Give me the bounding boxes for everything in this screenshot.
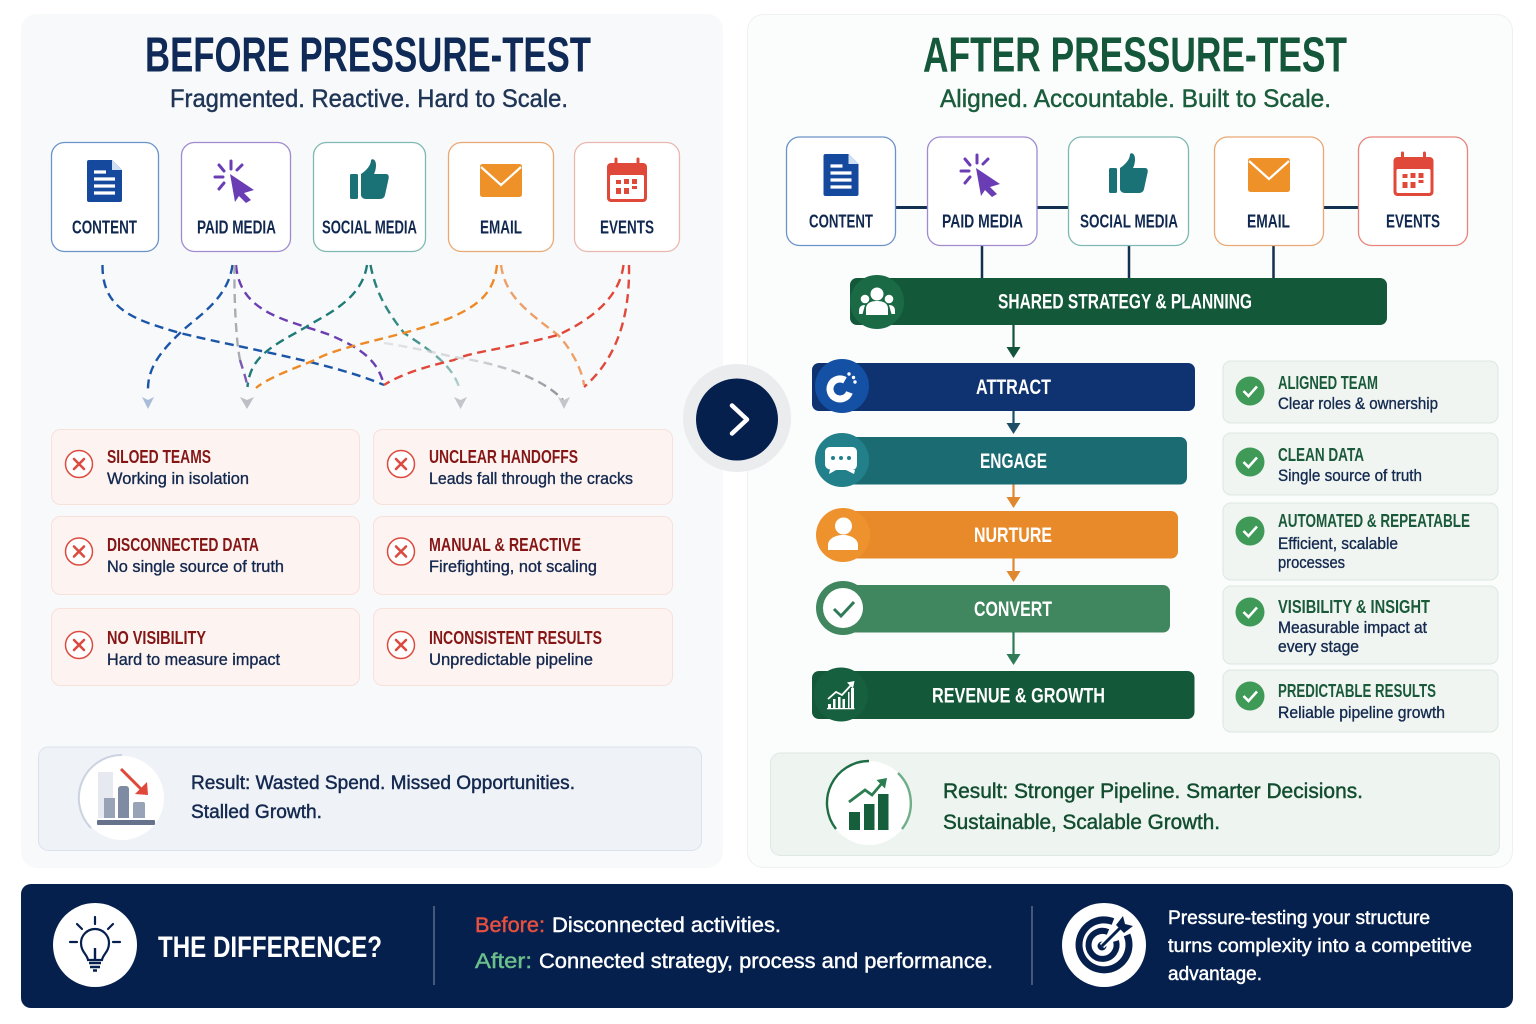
problem: unclear handoffs: Leads fall through the cracks	[429, 470, 633, 488]
arrow: engage to nurture	[1006, 484, 1020, 508]
banner: the difference	[21, 884, 1513, 1008]
channel card: content: CONTENT	[809, 212, 873, 232]
channel card: email	[448, 142, 554, 252]
before result callout: Result: Wasted Spend. Missed Opportunities.	[191, 772, 575, 794]
arrow: attract to engage	[1006, 411, 1020, 434]
channel card: email	[1214, 137, 1324, 246]
benefit: automated and repeatable	[1223, 503, 1498, 580]
benefit: aligned team: ALIGNED TEAM	[1278, 373, 1378, 393]
after statement: Connected strategy, process and performance.	[539, 949, 993, 973]
channel card: paid media	[182, 142, 290, 252]
stage: attract	[812, 359, 1195, 413]
bar: shared strategy and planning: SHARED STRATEGY & PLANNING	[998, 290, 1252, 314]
benefit: clean data: CLEAN DATA	[1278, 445, 1364, 465]
benefit: predictable results	[1223, 670, 1498, 732]
channel card: social media	[1068, 137, 1188, 246]
problem: inconsistent results	[374, 608, 672, 686]
problem: siloed teams: SILOED TEAMS	[107, 447, 211, 467]
channel card: social media	[314, 142, 426, 252]
closing statement	[1168, 908, 1472, 985]
after result callout	[770, 753, 1500, 856]
closing statement: advantage.	[1168, 964, 1262, 985]
stage: engage: ENGAGE	[980, 450, 1047, 473]
icon: rising bar chart	[827, 761, 911, 845]
problem: disconnected data	[52, 516, 360, 594]
problem: unclear handoffs: UNCLEAR HANDOFFS	[429, 447, 578, 467]
after title: AFTER PRESSURE-TEST	[923, 28, 1347, 82]
benefit: predictable results: Reliable pipeline growth	[1278, 704, 1445, 722]
before statement: Before:	[475, 913, 545, 937]
icon: declining bar chart	[79, 755, 164, 840]
closing statement: turns complexity into a competitive	[1168, 936, 1472, 957]
arrowheads	[142, 397, 570, 409]
problem: no visibility	[52, 608, 360, 686]
problem: inconsistent results: Unpredictable pipeline	[429, 651, 593, 669]
stage: attract: ATTRACT	[976, 376, 1051, 399]
arrow: strategy to attract	[1006, 325, 1020, 358]
channel card: events	[574, 142, 680, 252]
channel card: paid media: PAID MEDIA	[942, 212, 1023, 232]
channel card: social media: SOCIAL MEDIA	[1080, 212, 1178, 232]
stage: engage	[815, 433, 1187, 487]
benefit: automated and repeatable: AUTOMATED & REPEATABLE	[1278, 511, 1470, 531]
problem: inconsistent results: INCONSISTENT RESULTS	[429, 628, 602, 648]
closing statement: Pressure-testing your structure	[1168, 908, 1430, 929]
icon: light bulb	[53, 903, 137, 987]
channel card: email: EMAIL	[1247, 212, 1290, 232]
benefit: aligned team: Clear roles & ownership	[1278, 395, 1438, 413]
channel card: content: CONTENT	[72, 218, 137, 238]
benefit: visibility and insight	[1223, 586, 1498, 664]
stage: convert: CONVERT	[974, 598, 1052, 621]
icon: target	[1062, 903, 1146, 987]
benefit: visibility and insight: VISIBILITY & INSIGHT	[1278, 597, 1430, 617]
problem: manual and reactive: MANUAL & REACTIVE	[429, 535, 581, 555]
channel card: content	[786, 137, 896, 246]
benefit: clean data	[1223, 433, 1498, 495]
after subtitle: Aligned. Accountable. Built to Scale.	[940, 85, 1331, 113]
tangled dashed connections	[102, 265, 629, 400]
problem: no visibility: Hard to measure impact	[107, 651, 280, 669]
before result callout: Stalled Growth.	[191, 801, 322, 823]
before subtitle: Fragmented. Reactive. Hard to Scale.	[170, 85, 568, 113]
after result callout: Sustainable, Scalable Growth.	[943, 811, 1220, 834]
channel card: paid media: PAID MEDIA	[197, 218, 276, 238]
problem: disconnected data: DISCONNECTED DATA	[107, 535, 259, 555]
channel card: paid media	[928, 137, 1037, 246]
problem: unclear handoffs	[374, 430, 672, 504]
benefit: visibility and insight: every stage	[1278, 638, 1359, 656]
channel card: content	[52, 142, 158, 252]
benefit: clean data: Single source of truth	[1278, 467, 1422, 485]
arrow: before to after	[683, 364, 791, 472]
benefit: visibility and insight: Measurable impact at	[1278, 619, 1427, 637]
benefit: automated and repeatable: Efficient, scalable	[1278, 535, 1398, 553]
arrow: convert to revenue	[1006, 632, 1020, 665]
problem: no visibility: NO VISIBILITY	[107, 628, 206, 648]
channel card: events: EVENTS	[1386, 212, 1440, 232]
panel: before pressure-test	[21, 14, 723, 868]
benefit: automated and repeatable: processes	[1278, 554, 1345, 572]
problem: manual and reactive	[374, 516, 672, 594]
problem: siloed teams: Working in isolation	[107, 470, 249, 488]
arrow: nurture to convert	[1006, 558, 1020, 582]
stage: convert	[816, 581, 1170, 635]
banner: the difference: THE DIFFERENCE?	[158, 931, 382, 964]
problem: siloed teams	[52, 430, 360, 504]
channel card: events	[1358, 137, 1468, 246]
before statement: Disconnected activities.	[552, 913, 781, 937]
panel: after pressure-test	[748, 14, 1512, 868]
stage: revenue and growth: REVENUE & GROWTH	[932, 684, 1105, 708]
connector lines	[896, 208, 1358, 278]
before result callout	[38, 747, 702, 850]
after result callout: Result: Stronger Pipeline. Smarter Decisions.	[943, 780, 1363, 803]
benefit: predictable results: PREDICTABLE RESULTS	[1278, 681, 1436, 701]
problem: disconnected data: No single source of truth	[107, 558, 284, 576]
bar: shared strategy and planning	[850, 275, 1387, 329]
stage: nurture: NURTURE	[974, 524, 1052, 547]
benefit: aligned team	[1223, 361, 1498, 423]
channel card: email: EMAIL	[480, 218, 522, 238]
problem: manual and reactive: Firefighting, not scaling	[429, 558, 597, 576]
stage: nurture	[816, 508, 1178, 562]
after statement: After:	[475, 949, 532, 973]
before title: BEFORE PRESSURE-TEST	[145, 28, 591, 82]
stage: revenue and growth	[812, 668, 1194, 722]
channel card: events: EVENTS	[600, 218, 654, 238]
channel card: social media: SOCIAL MEDIA	[322, 218, 417, 238]
